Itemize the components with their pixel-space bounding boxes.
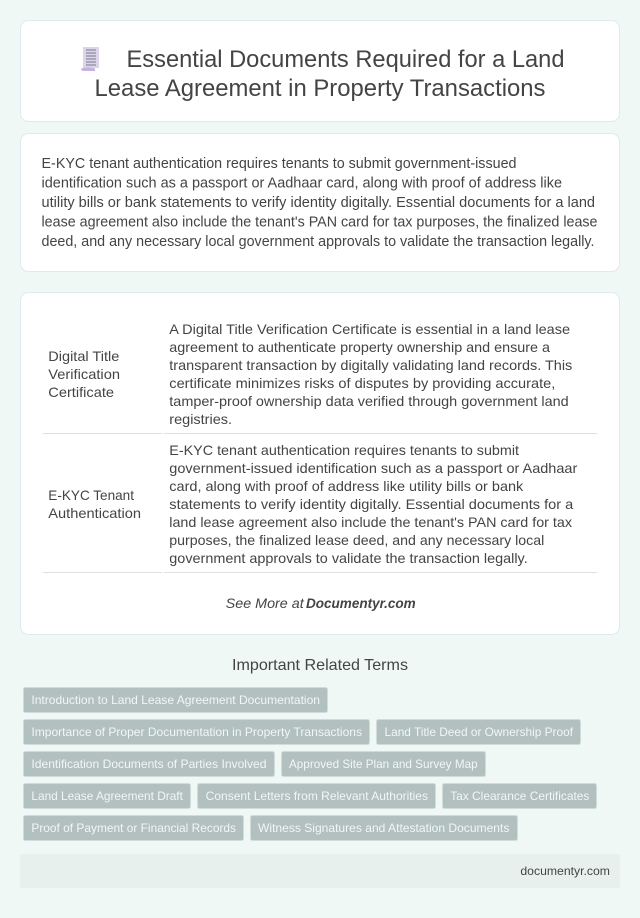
tag: Proof of Payment: Proof of Payment or Financial Records (31, 821, 236, 835)
tag: Introduction (24, 688, 328, 712)
tag: Witness Signatures (250, 816, 518, 840)
row text: Digital Title Verification Certificate description: tamper-proof ownership data verified through government land (169, 393, 569, 409)
row text: Digital Title Verification Certificate description: A Digital Title Verification Certificate is essential in a land lease (169, 321, 570, 337)
tag: Tax Clearance (442, 784, 596, 808)
tag: Consent Letters: Consent Letters from Relevant Authorities (206, 789, 428, 803)
tag: Approved Site Plan: Approved Site Plan and Survey Map (289, 757, 478, 771)
panel: header (20, 20, 620, 122)
text block: introduction paragraph: identification such as a passport or Aadhaar card, along with proof of address like (42, 174, 562, 192)
title: Essential Documents Required for a Land (126, 46, 564, 73)
row label: Digital Title Verification Certificate: Certificate (48, 384, 114, 400)
row text: E-KYC Tenant Authentication description: card, along with proof of address like utility bills or bank (169, 478, 524, 494)
tag: Witness Signatures: Witness Signatures and Attestation Documents (258, 821, 509, 835)
text block: introduction paragraph: deed, and any necessary local government approvals to validate the transaction legally. (42, 233, 594, 250)
tag: Introduction: Introduction to Land Lease Agreement Documentation (31, 693, 320, 707)
tag: Importance: Importance of Proper Documentation in Property Transactions (31, 725, 362, 739)
tag: Draft: Land Lease Agreement Draft (31, 789, 184, 803)
tag: Importance (24, 720, 370, 744)
row label: E-KYC Tenant Authentication: E-KYC Tenant (48, 487, 134, 503)
row text: E-KYC Tenant Authentication description: purposes, the finalized lease deed, and any necessary local (169, 532, 544, 548)
title: Lease Agreement in Property Transactions (94, 75, 546, 102)
row text: E-KYC Tenant Authentication description (169, 442, 578, 566)
text block: introduction paragraph: lease agreement also include the tenant's PAN card for tax purposes, the finalized lease (42, 214, 598, 230)
tag: Consent Letters (198, 784, 436, 808)
tag: Proof of Payment (24, 816, 244, 840)
row label: Digital Title Verification Certificate: Digital Title (48, 348, 120, 364)
row text: E-KYC Tenant Authentication description: E-KYC tenant authentication requires tenants to submit (169, 442, 519, 458)
row text: E-KYC Tenant Authentication description: government approvals to validate the transaction legally. (169, 550, 528, 566)
row label: Digital Title Verification Certificate (48, 348, 120, 400)
row label: E-KYC Tenant Authentication: Authentication (48, 505, 141, 521)
panel: introduction (20, 134, 620, 272)
row text: E-KYC Tenant Authentication description: statements to verify identity digitally. Essential documents for a (169, 496, 574, 512)
row text: Digital Title Verification Certificate description: agreement to authenticate property ownership and ensure a (169, 339, 550, 355)
related terms tags (24, 688, 596, 840)
row label: Digital Title Verification Certificate: Verification (48, 366, 120, 382)
row label: E-KYC Tenant Authentication (48, 487, 141, 521)
title (94, 46, 564, 102)
see more link (226, 595, 416, 611)
tag: Identification Documents: Identification Documents of Parties Involved (31, 757, 267, 771)
row text: E-KYC Tenant Authentication description: government-issued identification such as a passport or Aadhaar (169, 460, 578, 476)
footer (20, 854, 620, 888)
text block: introduction paragraph: utility bills or bank statements to verify identity digitally. Essential documents for a land (42, 194, 595, 211)
text block: introduction paragraph (42, 155, 598, 250)
footer: documentyr.com (520, 864, 610, 878)
tag: Tax Clearance: Tax Clearance Certificates (450, 789, 589, 803)
row text: Digital Title Verification Certificate description (169, 321, 572, 427)
panel: documents table (20, 292, 620, 634)
tag: Land Title Deed (376, 720, 580, 744)
see more link: Documentyr.com (306, 595, 416, 611)
row text: Digital Title Verification Certificate description: transparent transaction by digitally validating land records. This (169, 357, 572, 373)
tag: Identification Documents (24, 752, 274, 776)
text block: introduction paragraph: E-KYC tenant authentication requires tenants to submit government-issued (42, 155, 516, 172)
row text: E-KYC Tenant Authentication description: land lease agreement also include the tenant's PAN card for tax (169, 514, 572, 530)
row text: Digital Title Verification Certificate description: registries. (169, 411, 232, 427)
tag: Draft (24, 784, 190, 808)
see more link: See More at (226, 595, 305, 611)
icon: document scroll (81, 47, 99, 71)
tag: Land Title Deed: Land Title Deed or Ownership Proof (384, 725, 574, 739)
tag: Approved Site Plan (282, 752, 486, 776)
row text: Digital Title Verification Certificate description: certificate minimizes risks of disputes by providing accurate, (169, 375, 555, 391)
heading: Important Related Terms: Important Related Terms (232, 657, 408, 674)
